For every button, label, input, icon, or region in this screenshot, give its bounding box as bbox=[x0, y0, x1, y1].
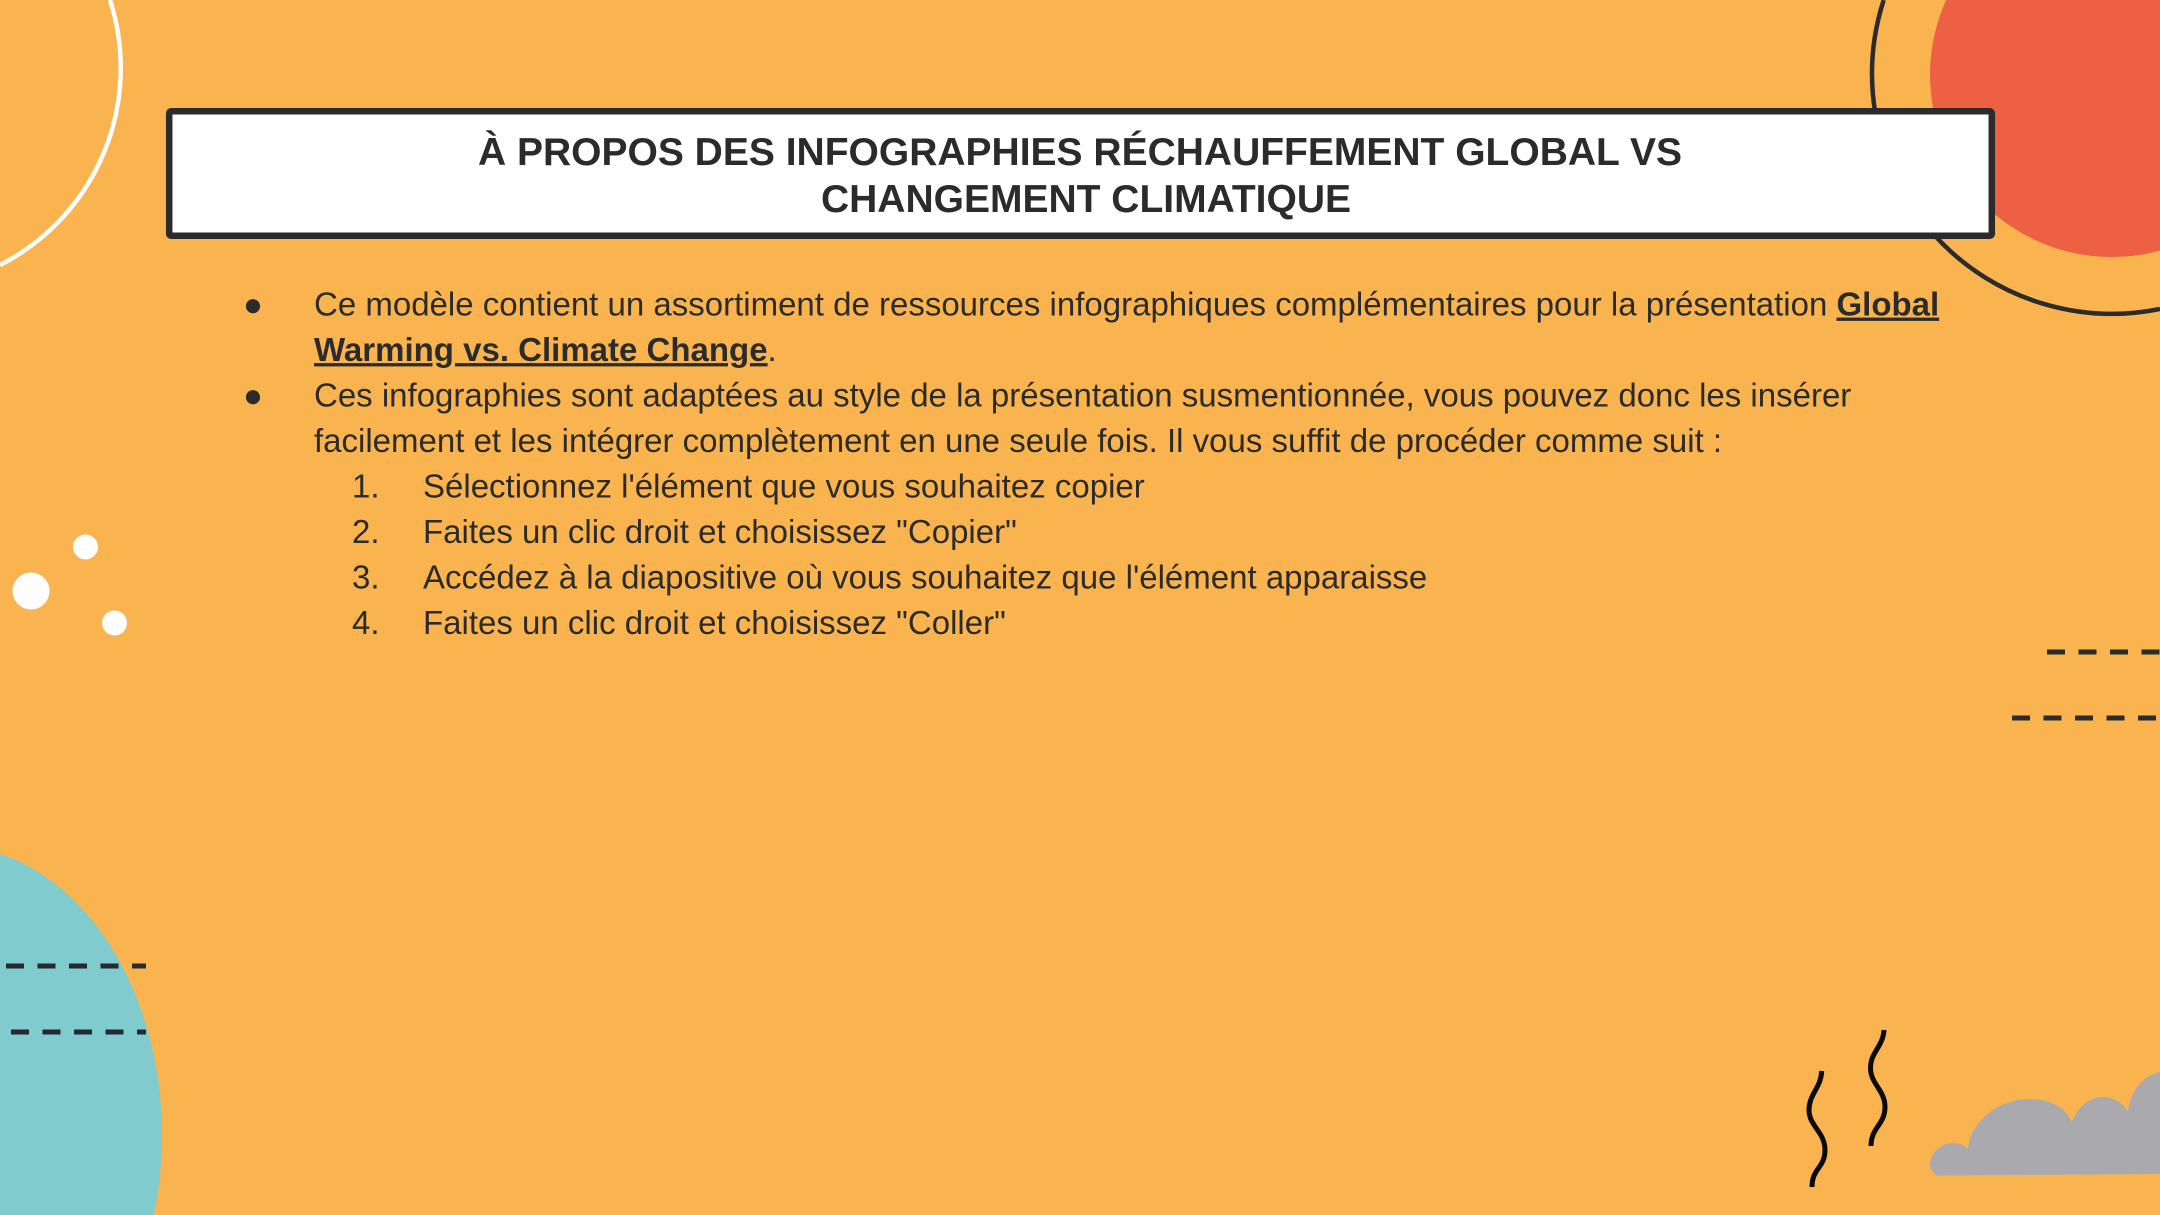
numbered steps: 3. bbox=[352, 559, 380, 596]
numbered steps: 2. bbox=[352, 513, 380, 550]
decoration: dashed lines right bbox=[2012, 652, 2160, 718]
decoration: teal circle bottom-left bbox=[0, 854, 162, 1215]
numbered steps: 4. bbox=[352, 604, 380, 641]
title text: À PROPOS DES INFOGRAPHIES RÉCHAUFFEMENT GLOBAL VS bbox=[478, 130, 1682, 174]
title text bbox=[478, 130, 1682, 221]
body text block bbox=[243, 286, 1939, 641]
bullet 1: ● bbox=[243, 286, 263, 323]
decoration: red circle top-right bbox=[1930, 0, 2160, 257]
bullet 1: Warming vs. Climate Change. bbox=[314, 331, 777, 368]
bullet 2: ● bbox=[243, 377, 263, 414]
numbered steps: Faites un clic droit et choisissez "Coller" bbox=[423, 604, 1006, 641]
numbered steps bbox=[352, 468, 1427, 641]
numbered steps: Faites un clic droit et choisissez "Copier" bbox=[423, 513, 1017, 550]
bullet 2 bbox=[243, 377, 1851, 459]
numbered steps: Sélectionnez l'élément que vous souhaitez copier bbox=[423, 468, 1145, 505]
bullet 2: Ces infographies sont adaptées au style de la présentation susmentionnée, vous pouvez donc les insérer bbox=[314, 377, 1851, 414]
decoration: squiggles bbox=[1809, 1030, 1885, 1187]
numbered steps: 1. bbox=[352, 468, 380, 505]
decoration: grey cloud bbox=[1930, 1072, 2160, 1176]
title box bbox=[169, 111, 1992, 236]
decoration: dark ring top-right bbox=[1872, 0, 2160, 314]
bullet 1: Ce modèle contient un assortiment de ressources infographiques complémentaires pour la présentation Global bbox=[314, 286, 1939, 323]
decoration: dashed lines left bbox=[6, 966, 146, 1032]
decoration: white ring top-left bbox=[0, 0, 121, 265]
decoration: white dots left bbox=[12, 534, 127, 636]
bullet 2: facilement et les intégrer complètement en une seule fois. Il vous suffit de procéder comme suit : bbox=[314, 422, 1722, 459]
title text: CHANGEMENT CLIMATIQUE bbox=[821, 178, 1351, 221]
numbered steps: Accédez à la diapositive où vous souhaitez que l'élément apparaisse bbox=[423, 559, 1427, 596]
bullet 1 bbox=[243, 286, 1939, 368]
